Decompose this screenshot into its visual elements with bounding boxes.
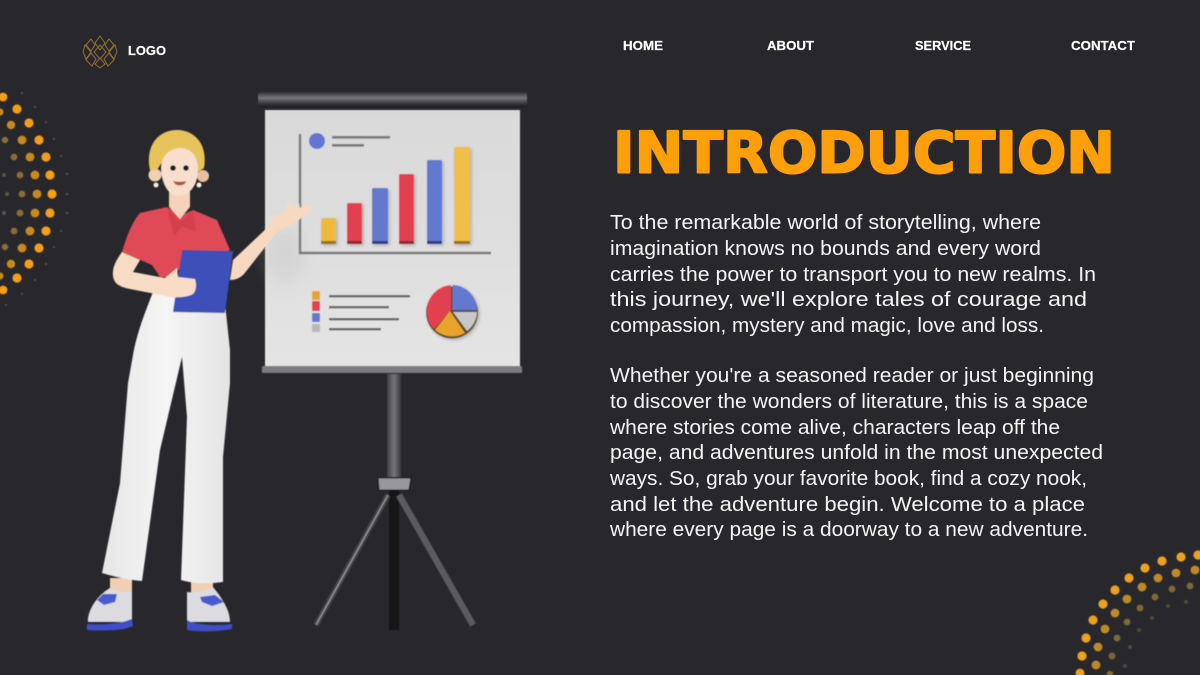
- intro paragraph 1: carries the power to transport you to new realms. In: [610, 264, 1096, 286]
- intro paragraph 1: this journey, we'll explore tales of courage and: [610, 289, 1087, 311]
- intro paragraph 2: Whether you're a seasoned reader or just beginning: [610, 365, 1094, 387]
- intro paragraph 2: and let the adventure begin. Welcome to a place: [610, 494, 1085, 516]
- navigation: [623, 38, 1135, 53]
- logo text: LOGO: [128, 43, 166, 58]
- left arm: [113, 252, 170, 296]
- intro paragraph 1: compassion, mystery and magic, love and loss.: [610, 315, 1044, 337]
- nav: contact: CONTACT: [1071, 38, 1135, 53]
- tripod stand: [316, 374, 473, 630]
- head: [148, 130, 209, 196]
- legend list: [312, 291, 410, 332]
- intro paragraph 1: [610, 212, 1096, 337]
- intro paragraph 2: where stories come alive, characters leap off the: [609, 417, 1060, 439]
- icon: logo emblem: [83, 36, 117, 68]
- clipboard: [173, 250, 233, 313]
- pants: [102, 292, 230, 583]
- eyes and mouth: [170, 165, 189, 186]
- intro paragraph 1: imagination knows no bounds and every word: [610, 238, 1041, 260]
- shirt collar: [167, 207, 196, 236]
- bars: [321, 147, 470, 244]
- title: INTRODUCTION: [613, 120, 1115, 186]
- chart legend dot and lines: [309, 133, 390, 149]
- hand shadow on board: [265, 227, 305, 283]
- intro paragraph 2: page, and adventures unfold in the most unexpected: [610, 442, 1103, 464]
- shoes: [87, 578, 232, 631]
- neck: [169, 190, 190, 219]
- presenter character: [87, 130, 312, 631]
- intro paragraph 2: ways. So, grab your favorite book, find a cozy nook,: [609, 468, 1087, 490]
- nav: home: HOME: [623, 38, 663, 53]
- face: [161, 148, 198, 196]
- logo: [83, 36, 166, 68]
- hair: [149, 130, 205, 172]
- decorative dots: bottom right arc: [1076, 550, 1200, 675]
- decorative dots: left arc: [0, 92, 68, 306]
- shirt: [122, 207, 230, 277]
- intro paragraph 1: To the remarkable world of storytelling, where: [610, 212, 1041, 234]
- axes: [300, 134, 491, 253]
- bottom rail: [262, 366, 522, 373]
- nav: about: ABOUT: [767, 38, 814, 53]
- ears and earrings: [148, 168, 209, 188]
- intro paragraph 2: where every page is a doorway to a new adventure.: [609, 519, 1088, 541]
- right arm and hand: [230, 202, 312, 280]
- intro paragraph 2: [609, 365, 1103, 541]
- board surface: [265, 110, 520, 367]
- hand on clipboard: [160, 268, 196, 297]
- nav: service: SERVICE: [915, 38, 971, 53]
- pie chart: [426, 285, 478, 338]
- intro paragraph 2: to discover the wonders of literature, this is a space: [610, 391, 1088, 413]
- roller: [258, 92, 527, 107]
- bar chart: [300, 133, 491, 253]
- presentation board: [258, 92, 527, 630]
